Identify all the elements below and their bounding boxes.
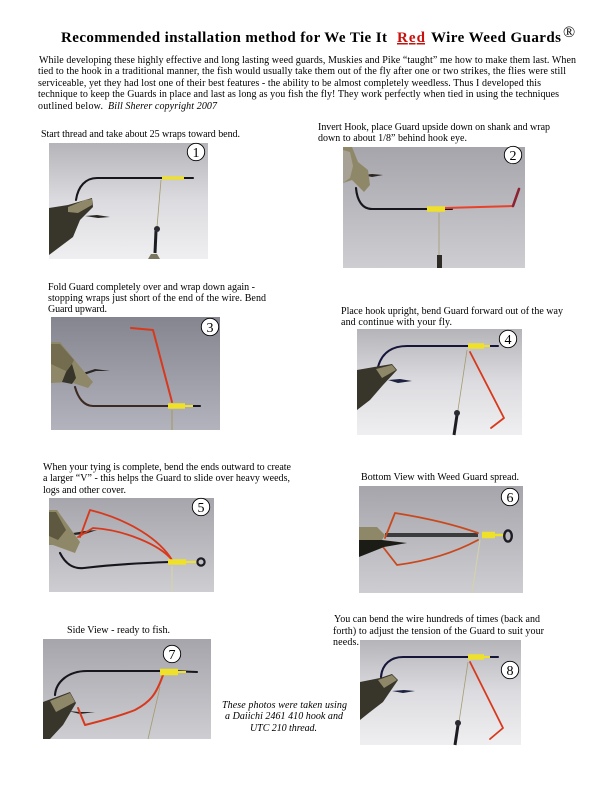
step 4 caption: and continue with your fly. (341, 317, 452, 328)
intro paragraph: While developing these highly effective and long lasting weed guards, Muskies and Pike “taught” me how to make them last. When (39, 55, 576, 66)
step 5 caption: When your tying is complete, bend the ends outward to create (43, 462, 292, 473)
step 8 caption (333, 614, 545, 648)
step 3 caption: stopping wraps just short of the end of the wire. Bend (48, 293, 266, 304)
step 8 photo: 8 (506, 664, 514, 679)
step 5 caption (43, 462, 292, 496)
intro paragraph: serviceable, yet they had lost one of their best features - the ability to be almost completely weedless. Thus I developed this (38, 78, 541, 89)
step 3 caption: Guard upward. (48, 304, 107, 315)
step 8 caption: forth) to adjust the tension of the Guard to suit your (333, 626, 545, 637)
photo note: UTC 210 thread. (250, 723, 317, 734)
step 6 caption: Bottom View with Weed Guard spread. (361, 472, 519, 483)
title: ® (563, 24, 575, 41)
step 3 photo: 3 (206, 321, 214, 336)
step 5 caption: a larger “V” - this helps the Guard to slide over heavy weeds, (43, 473, 290, 484)
intro paragraph: outlined below. (38, 101, 103, 112)
step 7 photo (43, 639, 211, 739)
step 2 caption (318, 122, 550, 144)
step 3 caption (48, 282, 266, 315)
step 3 caption: Fold Guard completely over and wrap down again - (48, 282, 255, 293)
step 4 photo (357, 329, 522, 435)
step 7 photo: 7 (168, 648, 176, 663)
intro paragraph (38, 55, 576, 112)
step 3 photo (51, 317, 220, 430)
photo note: a Daiichi 2461 410 hook and (225, 711, 344, 722)
step 5 caption: logs and other cover. (43, 485, 126, 496)
step 8 caption: You can bend the wire hundreds of times (back and (334, 614, 540, 625)
step 1 photo (49, 143, 208, 259)
step 1 photo: 1 (192, 146, 200, 161)
step 2 caption: down to about 1/8” behind hook eye. (318, 133, 467, 144)
step 8 caption: needs. (333, 637, 359, 648)
step 5 photo: 5 (198, 501, 204, 516)
title: Wire Weed Guards (431, 30, 561, 46)
intro paragraph: Bill Sherer copyright 2007 (108, 101, 218, 112)
step 4 caption (341, 306, 563, 328)
intro paragraph: technique to keep the Guards in place and last as long as you fish the fly! They work perfectly when tied in using the techniques (38, 89, 559, 100)
step 6 photo (359, 486, 523, 593)
step 4 caption: Place hook upright, bend Guard forward out of the way (341, 306, 563, 317)
photo note: These photos were taken using (222, 700, 347, 711)
title: Red (397, 30, 426, 46)
intro paragraph: tied to the hook in a traditional manner, the fish would usually take them out of the fly after one or two strikes, the flies were still (38, 66, 566, 77)
step 5 photo (49, 498, 214, 592)
step 2 photo (343, 146, 525, 268)
step 1 caption: Start thread and take about 25 wraps toward bend. (41, 129, 240, 140)
step 4 photo: 4 (504, 333, 512, 348)
title (61, 24, 575, 46)
step 7 caption: Side View - ready to fish. (67, 625, 170, 636)
step 8 photo (360, 640, 521, 745)
title: Recommended installation method for We Tie It (61, 30, 387, 46)
step 6 photo: 6 (506, 491, 514, 506)
photo note (222, 700, 347, 734)
step 2 photo: 2 (510, 149, 516, 164)
step 2 caption: Invert Hook, place Guard upside down on shank and wrap (318, 122, 550, 133)
